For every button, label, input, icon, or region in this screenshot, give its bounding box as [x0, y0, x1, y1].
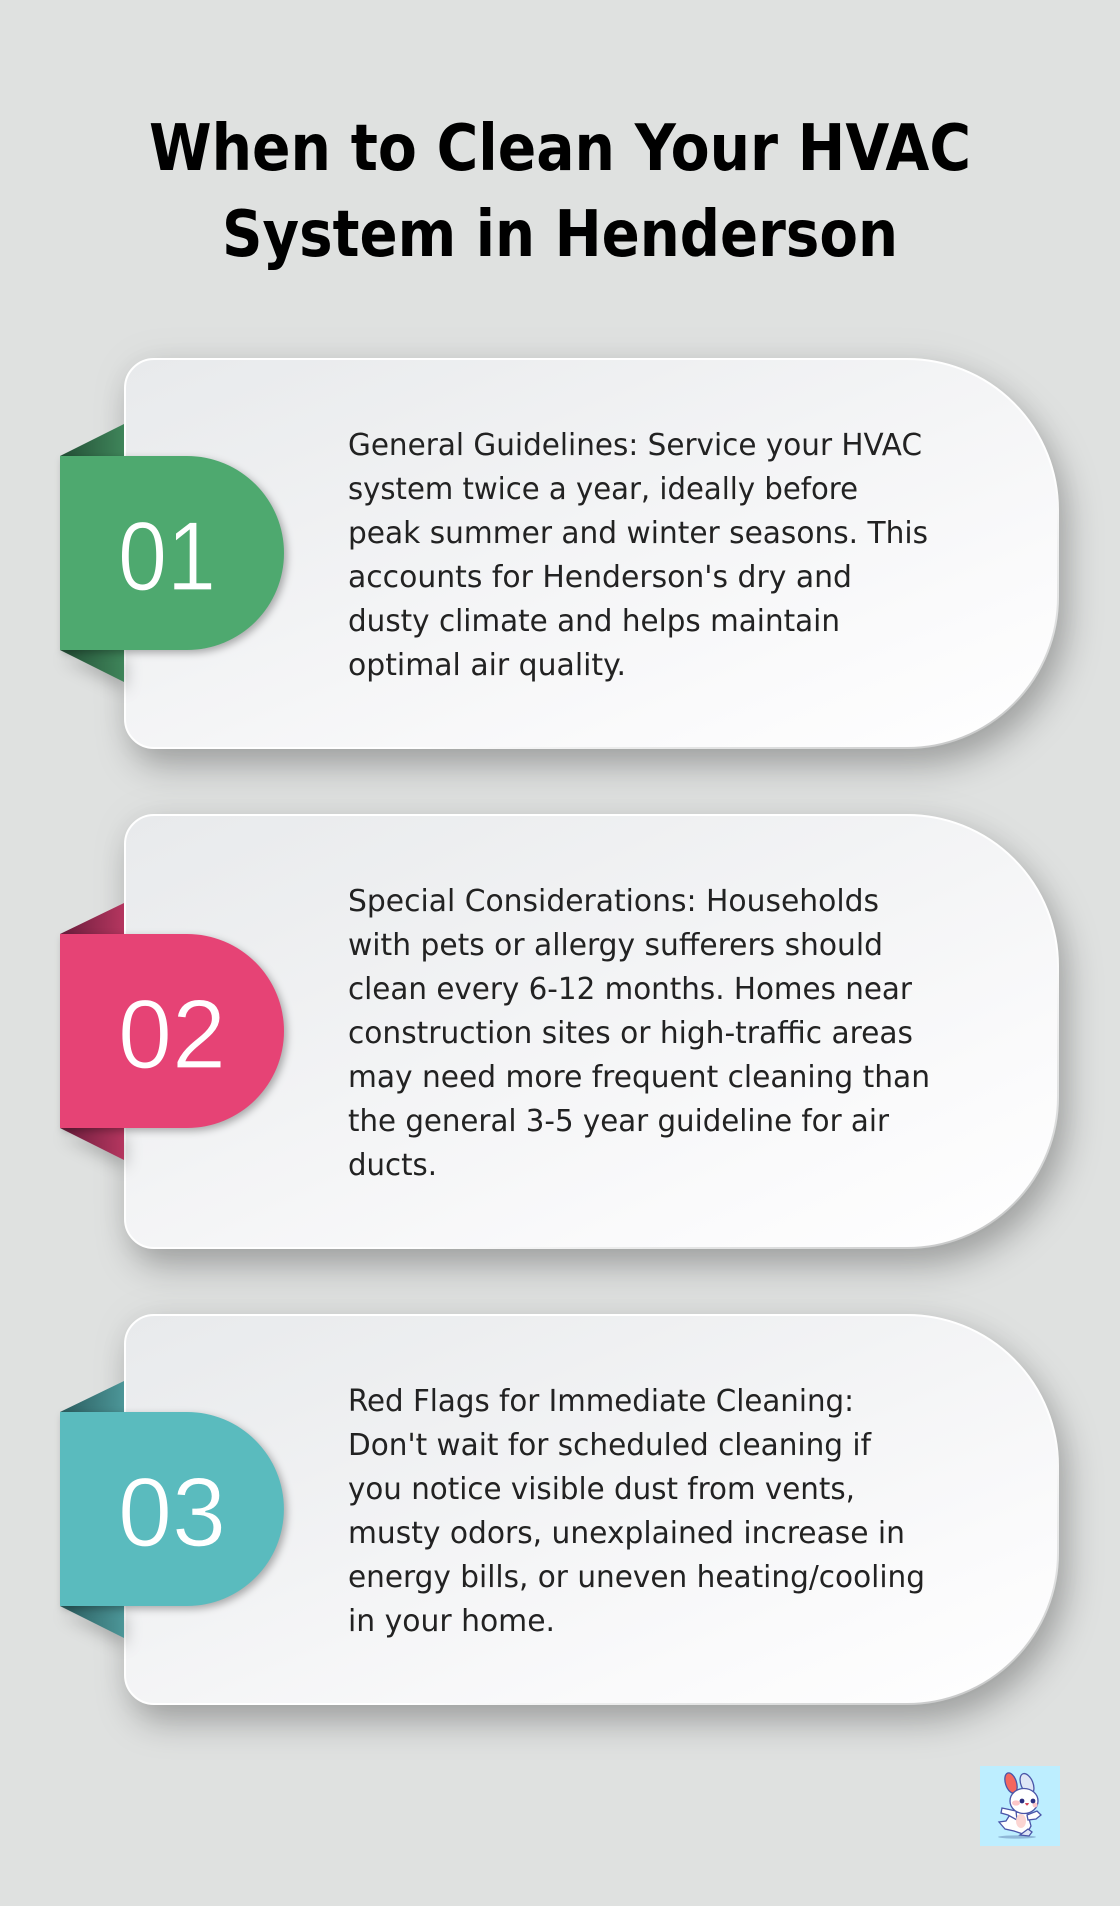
- title: When to Clean Your HVAC: [149, 112, 971, 186]
- number badge 01: [60, 456, 284, 650]
- number badge 03: 03: [118, 1457, 226, 1567]
- text: special considerations: clean every 6-12 months. Homes near: [348, 972, 913, 1007]
- text: red flags: energy bills, or uneven heating/cooling: [348, 1560, 925, 1595]
- panel: special considerations: [60, 815, 1058, 1248]
- ribbon fold bottom, green: [60, 650, 124, 682]
- text: special considerations: the general 3-5 year guideline for air: [348, 1104, 890, 1139]
- number badge 02: 02: [118, 979, 226, 1089]
- text: special considerations: ducts.: [348, 1148, 437, 1183]
- text: red flags: in your home.: [348, 1604, 555, 1639]
- text: special considerations: may need more frequent cleaning than: [348, 1060, 930, 1095]
- text: general guidelines: system twice a year, ideally before: [348, 472, 858, 507]
- text: special considerations: with pets or allergy sufferers should: [348, 928, 883, 963]
- title: [149, 112, 971, 272]
- title: System in Henderson: [222, 198, 898, 272]
- text: red flags: [348, 1384, 925, 1639]
- text: red flags: Don't wait for scheduled cleaning if: [348, 1428, 872, 1463]
- icon: rabbit logo: [980, 1766, 1060, 1846]
- number badge 01: 01: [118, 501, 216, 611]
- text: special considerations: [348, 884, 930, 1183]
- ribbon fold bottom, pink: [60, 1128, 124, 1160]
- ribbon fold bottom, teal: [60, 1606, 124, 1638]
- text: general guidelines: dusty climate and helps maintain: [348, 604, 840, 639]
- number badge 03: [60, 1412, 284, 1606]
- text: general guidelines: peak summer and winter seasons. This: [348, 516, 928, 551]
- panel: red flags: [60, 1315, 1058, 1704]
- number badge 02: [60, 934, 284, 1128]
- text: general guidelines: accounts for Henderson's dry and: [348, 560, 852, 595]
- text: red flags: you notice visible dust from vents,: [348, 1472, 855, 1507]
- text: red flags: musty odors, unexplained increase in: [348, 1516, 905, 1551]
- card 1 background: [125, 359, 1058, 748]
- ribbon fold top, pink: [60, 903, 124, 934]
- ribbon fold top, green: [60, 424, 124, 456]
- panel: general guidelines: [60, 359, 1058, 748]
- text: general guidelines: optimal air quality.: [348, 648, 626, 683]
- card 2 background: [125, 815, 1058, 1248]
- text: special considerations: construction sites or high-traffic areas: [348, 1016, 913, 1051]
- ribbon fold top, teal: [60, 1381, 124, 1412]
- text: general guidelines: [348, 428, 928, 683]
- text: red flags: Red Flags for Immediate Cleaning:: [348, 1384, 854, 1419]
- text: general guidelines: General Guidelines: Service your HVAC: [348, 428, 922, 463]
- card 3 background: [125, 1315, 1058, 1704]
- text: special considerations: Special Considerations: Households: [348, 884, 879, 919]
